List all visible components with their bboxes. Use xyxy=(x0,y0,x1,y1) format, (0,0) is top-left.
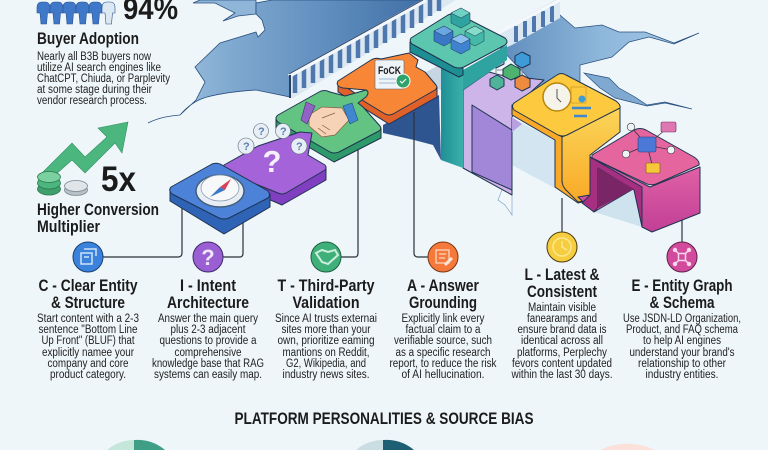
description: explicitly namee your xyxy=(42,347,134,359)
illustration: cracked floor xyxy=(148,0,699,227)
heading: C - Clear Entity xyxy=(38,276,138,295)
question mark: ? xyxy=(263,144,281,179)
heading xyxy=(37,200,159,236)
heading xyxy=(632,276,732,312)
description xyxy=(275,313,377,381)
description: utilize AI search engines like xyxy=(37,62,161,74)
heading: A - Answer xyxy=(407,276,479,295)
description: industry entities. xyxy=(646,369,718,381)
step block: pink entity graph xyxy=(578,122,700,232)
stat: 5x conversion multiplier xyxy=(37,122,159,236)
description: as a specific research xyxy=(396,347,490,359)
heading xyxy=(167,276,249,312)
description xyxy=(37,313,139,381)
description: questions to provide a xyxy=(160,335,257,347)
heading: Higher Conversion xyxy=(37,200,159,219)
icon: compass xyxy=(196,175,244,207)
heading: Grounding xyxy=(409,293,477,312)
description: own, prioritize eaming xyxy=(278,335,374,347)
description: to help AI engines xyxy=(643,335,721,347)
description: of AI hellucination. xyxy=(402,369,484,381)
description: ChatCPT, Chiuda, or Parplevity xyxy=(37,73,170,85)
icon: question bubbles: ? xyxy=(296,141,303,153)
icon: fact document: FoCK xyxy=(378,65,401,77)
description xyxy=(623,313,741,381)
icon: handshake xyxy=(311,242,341,272)
description: Up Front" (BLUF) that xyxy=(42,335,135,347)
description xyxy=(37,51,170,107)
description: knowledge base that RAG xyxy=(152,358,264,370)
icon: question bubbles: ? xyxy=(258,126,265,138)
donut chart 3 xyxy=(600,444,655,450)
column I: intent xyxy=(152,242,264,381)
description: comprehensive xyxy=(174,347,242,359)
description: mantions on Reddit, xyxy=(282,347,370,359)
icon: clock xyxy=(547,232,577,262)
description: report, to reduce the risk xyxy=(390,358,497,370)
description: Start content with a 2-3 xyxy=(37,313,139,325)
description: company and core xyxy=(48,358,128,370)
description: verifiable source, such xyxy=(394,335,492,347)
step block: orange answer xyxy=(337,53,437,124)
icon: network xyxy=(667,242,697,272)
icon: clock xyxy=(543,83,591,116)
heading: & Structure xyxy=(51,293,125,312)
value: 5x xyxy=(101,160,136,199)
heading xyxy=(524,265,600,301)
step block: yellow latest xyxy=(512,74,620,203)
column E: entity graph xyxy=(623,242,741,381)
description: identical across all xyxy=(521,335,603,347)
heading: & Schema xyxy=(650,293,715,312)
description: understand your brand's xyxy=(630,347,735,359)
description: product category. xyxy=(50,369,126,381)
description: industry news sites. xyxy=(282,369,370,381)
heading xyxy=(278,276,375,312)
step block: blue structure xyxy=(170,163,270,234)
description: Since AI trusts externai xyxy=(275,313,377,325)
description: vendor research process. xyxy=(37,95,147,107)
description: systems can easily map. xyxy=(154,369,262,381)
description: at some stage during their xyxy=(37,84,152,96)
column C: clear entity xyxy=(37,242,139,381)
description: sites more than your xyxy=(282,324,371,336)
icon: handshake xyxy=(301,102,358,137)
icon: small cubes xyxy=(489,52,530,91)
icon: entity nodes xyxy=(622,122,676,173)
description xyxy=(390,313,497,381)
heading: L - Latest & xyxy=(524,265,600,284)
heading: Multiplier xyxy=(37,217,100,236)
stat: 94% buyer adoption xyxy=(37,0,178,107)
description: factual claim to a xyxy=(406,324,481,336)
column A: answer grounding xyxy=(390,242,497,381)
block: teal tower xyxy=(410,8,507,168)
description: platforms, Perplechy xyxy=(517,347,607,359)
block: lavender tower xyxy=(463,52,544,195)
description: Answer the main query xyxy=(158,313,258,325)
icon: question bubbles: ? xyxy=(280,126,287,138)
icon: question bubbles xyxy=(238,124,307,154)
icon: question: ? xyxy=(201,245,215,270)
heading xyxy=(38,276,138,312)
donut chart 1 xyxy=(107,440,165,450)
icon: rising arrow xyxy=(43,122,128,175)
heading: Buyer Adoption xyxy=(37,29,139,48)
description: Maintain visible xyxy=(528,302,596,314)
icon: green coin stack xyxy=(38,172,60,195)
donut chart 2 xyxy=(356,440,414,450)
description: Use JSDN-LD Organization, xyxy=(623,313,741,325)
description: sentence "Bottom Line xyxy=(38,324,138,336)
connector lines xyxy=(103,112,682,257)
icon: data cubes xyxy=(434,8,484,54)
heading: Architecture xyxy=(167,293,249,312)
heading: E - Entity Graph xyxy=(632,276,732,295)
heading: Consistent xyxy=(527,282,597,301)
description: fanearamps and xyxy=(527,313,597,325)
icon: six people xyxy=(37,2,115,24)
heading: I - Intent xyxy=(180,276,236,295)
description: relationship to other xyxy=(638,358,726,370)
description: plus 2-3 adjacent xyxy=(170,324,246,336)
description: G2, Wikipedia, and xyxy=(286,358,366,370)
heading: Validation xyxy=(292,293,360,312)
description: fevors content updated xyxy=(512,358,612,370)
step block: purple intent xyxy=(223,124,326,205)
heading: T - Third-Party xyxy=(278,276,375,295)
description xyxy=(511,302,612,381)
description: ensure brand data is xyxy=(518,324,607,336)
description: Product, and FAQ schema xyxy=(626,324,738,336)
column L: latest xyxy=(511,232,612,381)
icon: document xyxy=(73,242,103,272)
step block: green validation xyxy=(276,90,381,162)
description: Nearly all B3B buyers now xyxy=(37,51,152,63)
icon: grey coin xyxy=(64,180,88,196)
railing xyxy=(289,0,560,98)
icon: document with pencil xyxy=(428,242,458,272)
column T: third-party xyxy=(275,242,377,381)
heading xyxy=(407,276,479,312)
icon: question bubbles: ? xyxy=(243,141,250,153)
description: Explicitly link every xyxy=(402,313,485,325)
section title: PLATFORM PERSONALITIES & SOURCE BIAS xyxy=(234,409,534,428)
description: within the last 30 days. xyxy=(511,369,612,381)
description xyxy=(152,313,264,381)
